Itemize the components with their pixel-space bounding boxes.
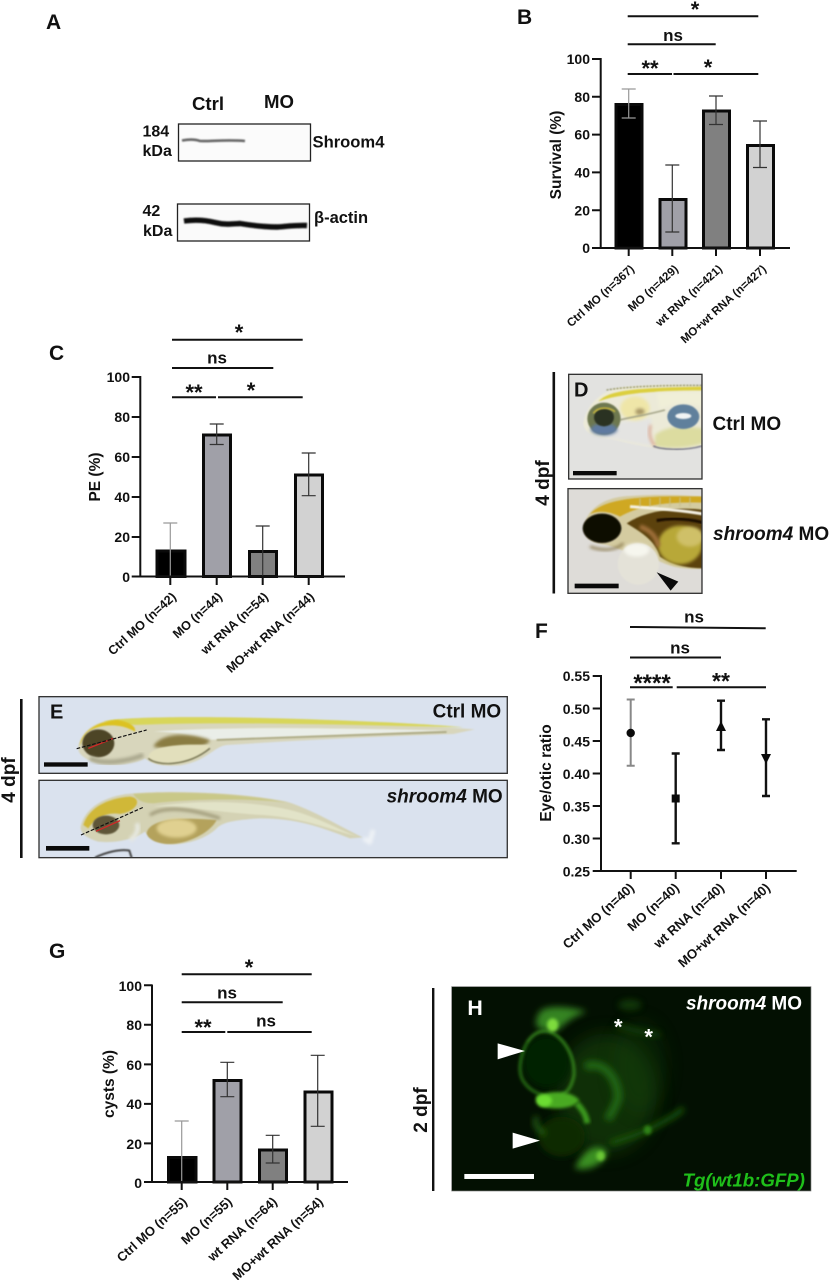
axes [132, 376, 345, 585]
panel letter B: B [517, 6, 532, 29]
y tick labels: 40 [126, 1096, 142, 1112]
significance brackets: ns [217, 983, 237, 1002]
axes [592, 58, 790, 256]
bars [157, 435, 322, 576]
significance brackets: ** [185, 380, 203, 405]
size label 42 kDa: 42 [142, 203, 160, 220]
x category labels: MO+wt RNA (n=427) [678, 262, 769, 346]
stage label 2 dpf: 2 dpf [411, 1087, 432, 1133]
asterisks: * [644, 1024, 653, 1049]
y tick labels: 40 [574, 164, 590, 180]
panel C: PE bar chart [49, 320, 345, 676]
measurement lines [96, 821, 120, 831]
vertical rule [20, 699, 23, 858]
significance brackets: ns [670, 638, 690, 657]
significance brackets: * [235, 320, 244, 345]
panel D: larva head photos [533, 372, 829, 594]
panel letter D: D [574, 380, 588, 402]
panel letter F: F [535, 620, 548, 643]
x category labels: wt RNA (n=54) [198, 590, 271, 658]
panel letter H: H [467, 996, 483, 1020]
x category labels: Ctrl MO (n=367) [564, 262, 637, 330]
y tick labels: 20 [126, 1136, 142, 1152]
significance brackets: ns [684, 608, 704, 627]
label Ctrl MO: Ctrl MO [712, 414, 781, 435]
x category labels: MO+wt RNA (n=40) [675, 880, 773, 970]
photo: shroom4 MO head [568, 489, 703, 593]
y axis title: Eye/otic ratio [538, 724, 555, 822]
significance brackets [172, 320, 303, 405]
label Tg(wt1b:GFP): Tg(wt1b:GFP) [683, 1170, 805, 1191]
x category labels: MO (n=44) [170, 590, 225, 641]
significance brackets: ** [712, 668, 730, 694]
significance brackets: * [245, 955, 254, 980]
label Shroom4: Shroom4 [312, 132, 385, 152]
scale bar [464, 1174, 534, 1179]
x category labels: MO (n=55) [178, 1194, 235, 1248]
y tick labels: 0.50 [563, 701, 590, 717]
x category labels: MO (n=429) [626, 262, 681, 314]
y tick labels: 0.45 [563, 734, 590, 750]
y tick labels: 20 [574, 202, 590, 218]
panel F: eye/otic ratio dot plot [535, 608, 797, 970]
x category labels: Ctrl MO (n=42) [105, 590, 179, 658]
asterisks: * [614, 1014, 623, 1039]
significance brackets [630, 608, 766, 697]
blot: beta-actin [178, 204, 310, 241]
panel letter C: C [49, 342, 64, 365]
y tick labels [119, 978, 142, 1191]
size label 42 kDa: kDa [143, 223, 172, 240]
label shroom4 MO: shroom4 MO [387, 787, 503, 808]
panel G: cysts bar chart [49, 940, 348, 1280]
blot: Shroom4 [178, 124, 310, 161]
y tick labels: 0.35 [563, 798, 590, 814]
x category labels: MO+wt RNA (n=44) [224, 590, 317, 676]
size label 42 kDa [142, 203, 172, 240]
y tick labels: 0.55 [563, 668, 590, 684]
x category labels [560, 880, 773, 970]
y tick labels: 80 [574, 89, 590, 105]
y tick labels: 0.40 [563, 766, 590, 782]
lane label MO: MO [264, 91, 294, 112]
y tick labels: 60 [574, 126, 590, 142]
significance brackets: ns [663, 26, 683, 45]
panel letter G: G [49, 940, 65, 963]
axes [593, 675, 797, 879]
y axis title: Survival (%) [548, 111, 565, 199]
y tick labels: 0 [122, 569, 130, 585]
vertical rule [432, 988, 434, 1191]
y tick labels: 80 [126, 1017, 142, 1033]
scale bar [46, 846, 89, 851]
significance brackets [628, 0, 758, 81]
significance brackets: ns [207, 348, 227, 368]
y tick labels [567, 51, 590, 256]
size label 184 kDa [142, 124, 172, 160]
significance brackets: ** [194, 1015, 212, 1040]
y tick labels [563, 668, 590, 880]
panel letter A: A [46, 11, 61, 34]
photo: shroom4 MO larva [39, 780, 507, 858]
panel E: whole larva photos [0, 697, 507, 858]
y tick labels: 0 [134, 1175, 142, 1191]
asterisks [614, 1014, 653, 1049]
y tick labels: 20 [114, 529, 130, 545]
x category labels [114, 1194, 326, 1280]
y tick labels [107, 369, 130, 585]
error bars [175, 1055, 325, 1183]
photo: Ctrl MO head [569, 374, 703, 479]
x category labels: MO (n=40) [624, 880, 682, 934]
y tick labels: 0.30 [563, 831, 590, 847]
x category labels: wt RNA (n=40) [650, 880, 727, 952]
label shroom4 MO: shroom4 MO [713, 524, 829, 545]
size label 184 kDa: 184 [142, 124, 169, 140]
lane label Ctrl: Ctrl [192, 93, 224, 114]
error bars [163, 424, 316, 577]
x category labels [105, 590, 317, 676]
bars [616, 104, 774, 248]
x category labels: Ctrl MO (n=55) [114, 1194, 190, 1265]
axes [144, 984, 348, 1190]
y tick labels: 60 [126, 1057, 142, 1073]
y axis title: PE (%) [87, 452, 104, 502]
error bars [622, 89, 767, 232]
bars [168, 1080, 332, 1182]
y tick labels: 0 [582, 240, 590, 256]
y tick labels: 100 [107, 369, 130, 385]
arrowheads [498, 1043, 525, 1059]
x category labels: Ctrl MO (n=40) [560, 880, 637, 952]
vertical rule [552, 372, 555, 594]
y tick labels: 60 [114, 449, 130, 465]
significance brackets: **** [633, 670, 671, 697]
x category labels: wt RNA (n=64) [204, 1194, 280, 1265]
scale bar [575, 584, 619, 588]
scale bar [573, 471, 617, 475]
y tick labels: 100 [567, 51, 590, 67]
y tick labels: 0.25 [563, 864, 590, 880]
significance brackets: * [704, 55, 713, 80]
panel H: fluorescence image [411, 987, 811, 1191]
panel letter E: E [50, 701, 63, 723]
y tick labels: 80 [114, 409, 130, 425]
label beta-actin: β-actin [314, 209, 368, 227]
photo: GFP fluorescence [452, 987, 811, 1191]
y tick labels: 100 [119, 978, 142, 994]
significance brackets [182, 955, 312, 1040]
label Ctrl MO: Ctrl MO [433, 701, 501, 722]
size label 184 kDa: kDa [142, 143, 172, 160]
data points with error bars [626, 700, 771, 843]
y tick labels: 40 [114, 489, 130, 505]
x category labels [564, 262, 769, 346]
scale bar [44, 762, 88, 767]
significance brackets: * [247, 378, 256, 403]
measurement lines [88, 738, 113, 748]
significance brackets: ns [256, 1012, 276, 1031]
photo: Ctrl MO larva [39, 697, 507, 773]
y axis title: cysts (%) [101, 1050, 118, 1118]
x category labels: wt RNA (n=421) [652, 262, 725, 330]
stage label 4 dpf: 4 dpf [533, 460, 554, 506]
label shroom4 MO: shroom4 MO [686, 993, 802, 1014]
panel B: survival bar chart [517, 0, 790, 346]
significance brackets: ** [641, 56, 659, 81]
panel A: western blot [46, 11, 385, 241]
